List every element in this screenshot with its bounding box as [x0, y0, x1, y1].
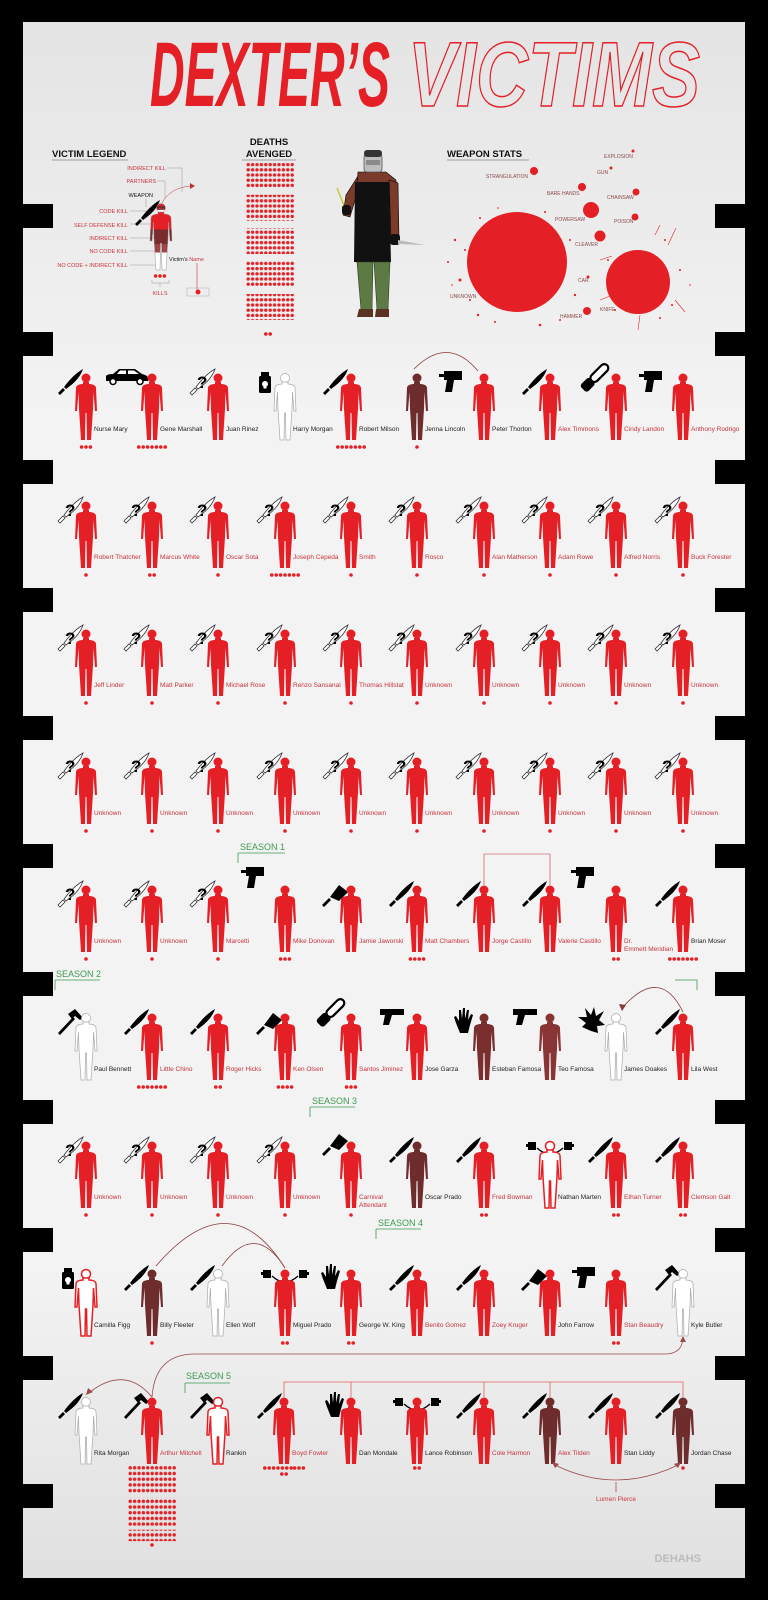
- victim: Rosco: [389, 497, 444, 577]
- panel: victim legend: CODE KILL: [99, 209, 128, 215]
- victim: Unknown: [124, 881, 187, 961]
- victim: Matt Chambers: Matt Chambers: [425, 938, 470, 945]
- arrows: Miguel Prado partners: [156, 1223, 285, 1268]
- victim: Little Chino: [124, 1009, 193, 1089]
- victim: Unknown: Unknown: [94, 1194, 121, 1201]
- victim: Unknown: Unknown: [94, 938, 121, 945]
- annotation: Lumen Pierce: [552, 1462, 681, 1503]
- victim: Unknown: [456, 625, 519, 705]
- victim: Unknown: Unknown: [359, 810, 386, 817]
- panel: weapon stats: EXPLOSION: [604, 154, 633, 160]
- victim: Unknown: Unknown: [425, 682, 452, 689]
- row 5 victims: [58, 842, 727, 961]
- victim: Boyd Fowler: [257, 1393, 329, 1476]
- victim: Stan Beaudry: Stan Beaudry: [624, 1322, 664, 1329]
- panel: weapon stats: HAMMER: [560, 314, 583, 320]
- panel: victim legend: INDIRECT KILL: [89, 236, 128, 242]
- victim: Unknown: Unknown: [160, 810, 187, 817]
- victim: Peter Thorton: Peter Thorton: [492, 426, 532, 433]
- victim: Camilla Figg: Camilla Figg: [94, 1322, 131, 1329]
- victim: Unknown: Unknown: [624, 682, 651, 689]
- victim: Unknown: [655, 753, 718, 833]
- victim: Juan Rinez: Juan Rinez: [226, 426, 259, 433]
- victim: Unknown: [389, 753, 452, 833]
- victim: Robert Thatcher: Robert Thatcher: [94, 554, 142, 561]
- victim: Zoey Kruger: [456, 1265, 529, 1336]
- victim: Esteban Famosa: [454, 1008, 542, 1080]
- panel: victim legend: KILLS: [153, 291, 168, 297]
- victim: Clemson Galt: Clemson Galt: [691, 1194, 731, 1201]
- victim: Unknown: Unknown: [226, 1194, 253, 1201]
- victim: Roger Hicks: Roger Hicks: [226, 1066, 262, 1073]
- victim: Anthony Rodrigo: Anthony Rodrigo: [691, 426, 740, 433]
- panel: weapon stats: [447, 149, 691, 330]
- victim: Boyd Fowler: Boyd Fowler: [292, 1450, 329, 1457]
- victim: Jenna Lincoln: Jenna Lincoln: [425, 426, 465, 433]
- victim: Santos Jiminez: Santos Jiminez: [359, 1066, 403, 1073]
- victim: Unknown: [58, 1137, 121, 1217]
- victim: Rankin: [190, 1393, 247, 1464]
- annotation: Lumen Pierce: Lumen Pierce: [596, 1496, 636, 1503]
- panel: victim legend: NO CODE + INDIRECT KILL: [57, 263, 128, 269]
- victim: Stan Liddy: Stan Liddy: [624, 1450, 655, 1457]
- panel: weapon stats: POWERSAW: [555, 217, 585, 223]
- victim: Unknown: Unknown: [160, 1194, 187, 1201]
- panel: victim legend: NO CODE KILL: [89, 249, 128, 255]
- victim: John Farrow: [521, 1269, 594, 1336]
- panel: weapon stats: UNKNOWN: [450, 294, 477, 300]
- victim: Alfred Norris: Alfred Norris: [624, 554, 661, 561]
- victim: Unknown: [257, 753, 320, 833]
- victim: Harry Morgan: Harry Morgan: [293, 426, 333, 433]
- victim: Matt Chambers: [389, 881, 470, 961]
- panel: weapon stats: CLEAVER: [575, 242, 598, 248]
- panel: weapon stats: WEAPON STATS: [447, 149, 522, 160]
- victim: Jenna Lincoln: [406, 374, 465, 449]
- victim: Unknown: [58, 753, 121, 833]
- panel: weapon stats: CAR: [578, 278, 589, 284]
- victim: George W. King: [321, 1264, 405, 1345]
- victim: Fred Bowman: Fred Bowman: [492, 1194, 533, 1201]
- victim: Stan Beaudry: [572, 1267, 664, 1345]
- victim: Jordan Chase: [655, 1393, 732, 1470]
- victim: Unknown: Unknown: [558, 682, 585, 689]
- victim: Carnival Attendant: Attendant: [359, 1202, 387, 1209]
- victim: Stan Liddy: [588, 1393, 655, 1464]
- victim: Thomas Hillstat: [323, 625, 404, 705]
- victim: Rita Morgan: Rita Morgan: [94, 1450, 130, 1457]
- victim: Matt Parker: Matt Parker: [160, 682, 194, 689]
- victim: James Doakes: James Doakes: [624, 1066, 668, 1073]
- arrow: Arthur Mitchell to Rita Morgan: [86, 1380, 152, 1397]
- victim: Alfred Norris: [588, 497, 661, 577]
- victim: Nurse Mary: Nurse Mary: [94, 426, 128, 433]
- panel: weapon stats: STRANGULATION: [486, 174, 528, 180]
- season 3 label: SEASON 3: [312, 1096, 357, 1106]
- panel: deaths avenged: DEATHS: [250, 137, 288, 148]
- victim: Arthur Mitchell: [124, 1393, 202, 1547]
- season 2 label: [55, 969, 101, 990]
- victim: Matt Parker: [124, 625, 194, 705]
- victim: Jose Garza: Jose Garza: [425, 1066, 459, 1073]
- panel: victim legend: Victim's Name: [169, 257, 204, 263]
- victim: Ethan Turner: Ethan Turner: [624, 1194, 662, 1201]
- victim: Jamie Jaworski: Jamie Jaworski: [359, 938, 403, 945]
- panel: weapon stats: POISON: [614, 219, 634, 225]
- victim: Renzo Sansanal: Renzo Sansanal: [293, 682, 341, 689]
- victim: Smith: Smith: [359, 554, 376, 561]
- victim: Lila West: Lila West: [691, 1066, 718, 1073]
- panel: victim legend: SELF DEFENSE KILL: [74, 223, 128, 229]
- victim: Jordan Chase: Jordan Chase: [691, 1450, 732, 1457]
- season 3 label: [310, 1096, 357, 1117]
- victim: Unknown: [389, 625, 452, 705]
- row 3 victims: [58, 625, 718, 705]
- victim: Dr. Emmett Meridian: [571, 867, 674, 961]
- victim: Kyle Butler: Kyle Butler: [691, 1322, 723, 1329]
- victim: Esteban Famosa: Esteban Famosa: [492, 1066, 542, 1073]
- victim: Unknown: Unknown: [492, 810, 519, 817]
- illustration: Dexter: [337, 150, 425, 317]
- panel: deaths avenged: AVENGED: [246, 149, 292, 160]
- victim: George W. King: George W. King: [359, 1322, 405, 1329]
- victim: Rankin: Rankin: [226, 1450, 247, 1457]
- victim: Robert Thatcher: [58, 497, 142, 577]
- victim: Arthur Mitchell: Arthur Mitchell: [160, 1450, 202, 1457]
- row 2 victims: [58, 497, 732, 577]
- victim: Brian Moser: [655, 881, 727, 961]
- victim: Unknown: Unknown: [624, 810, 651, 817]
- season 5 label: [185, 1371, 231, 1393]
- arrow: Peter Thorton to Jenna Lincoln: [414, 352, 478, 371]
- arrow: Arthur Mitchell to Kyle Butler: [152, 1336, 686, 1397]
- victim: Zoey Kruger: Zoey Kruger: [492, 1322, 529, 1329]
- victim: Unknown: Unknown: [691, 682, 718, 689]
- victim: Carnival Attendant: [322, 1134, 387, 1217]
- victim: Unknown: Unknown: [293, 810, 320, 817]
- panel: weapon stats: BARE HANDS: [547, 191, 580, 197]
- row 1 victims: [58, 352, 740, 449]
- bracket: Castillo partners: [484, 854, 550, 885]
- victim: Robert Milson: Robert Milson: [359, 426, 399, 433]
- victim: Unknown: [124, 1137, 187, 1217]
- victim: Kyle Butler: [655, 1265, 723, 1336]
- victim: Buck Forester: Buck Forester: [691, 554, 732, 561]
- panel: victim legend: WEAPON: [129, 193, 153, 199]
- victim: Mike Donovan: Mike Donovan: [293, 938, 335, 945]
- season 2 label: SEASON 2: [56, 969, 101, 979]
- season 1 label: [238, 842, 285, 863]
- victim: Ellen Wolf: Ellen Wolf: [226, 1322, 255, 1329]
- victim: Gene Marshall: Gene Marshall: [160, 426, 203, 433]
- panel: weapon stats: KNIFE: [600, 307, 615, 313]
- victim: Robert Milson: [323, 369, 399, 449]
- victim: Alex Timmons: [522, 369, 600, 440]
- victim: Ethan Turner: [588, 1137, 662, 1217]
- title: DEXTER’S: [150, 24, 390, 126]
- victim: Benito Gomez: Benito Gomez: [425, 1322, 466, 1329]
- victim: Marcus White: [124, 497, 200, 577]
- panel: victim legend: INDIRECT KILL: [127, 166, 166, 172]
- victim: Billy Fleeter: [124, 1265, 195, 1345]
- victim: Jorge Castillo: [456, 881, 532, 952]
- victim: Unknown: [323, 753, 386, 833]
- victim: Roger Hicks: [190, 1009, 262, 1089]
- victim: Unknown: Unknown: [293, 1194, 320, 1201]
- victim: Ellen Wolf: [190, 1265, 255, 1336]
- victim: Cindy Landon: Cindy Landon: [624, 426, 664, 433]
- victim: Jeff Linder: Jeff Linder: [94, 682, 125, 689]
- victim: Gene Marshall: [106, 369, 203, 449]
- victim: Unknown: Unknown: [492, 682, 519, 689]
- victim: Rosco: Rosco: [425, 554, 444, 561]
- victim: Clemson Galt: [655, 1137, 731, 1217]
- victim: Adam Rowe: Adam Rowe: [558, 554, 594, 561]
- victim: Paul Bennett: Paul Bennett: [94, 1066, 131, 1073]
- victim: Unknown: Unknown: [226, 810, 253, 817]
- panel: weapon stats: CHAINSAW: [607, 195, 634, 201]
- victim: Fred Bowman: [456, 1137, 533, 1217]
- panel: victim legend: PARTNERS: [127, 179, 156, 185]
- victim: Teo Famosa: [513, 1009, 594, 1080]
- victim: Marcetti: [190, 881, 249, 961]
- victim: Alex Timmons: Alex Timmons: [558, 426, 600, 433]
- victim: Thomas Hillstat: Thomas Hillstat: [359, 682, 404, 689]
- victim: Jamie Jaworski: [322, 885, 403, 952]
- victim: Harry Morgan: [259, 372, 333, 440]
- victim: Nathan Marten: [526, 1142, 601, 1208]
- victim: Nurse Mary: [58, 369, 128, 449]
- victim: Unknown: Unknown: [558, 810, 585, 817]
- victim: Marcus White: Marcus White: [160, 554, 200, 561]
- victim: Unknown: [522, 625, 585, 705]
- victim: Unknown: Unknown: [94, 810, 121, 817]
- victim: Peter Thorton: [439, 371, 532, 440]
- victim: Teo Famosa: Teo Famosa: [558, 1066, 594, 1073]
- victim: John Farrow: John Farrow: [558, 1322, 594, 1329]
- victim: Dr. Emmett Meridian: Emmett Meridian: [624, 946, 674, 953]
- victim: Paul Bennett: [58, 1009, 131, 1080]
- victim: Buck Forester: [655, 497, 732, 577]
- victim: Oscar Prado: [389, 1137, 462, 1208]
- victim: James Doakes: [578, 1007, 668, 1080]
- victim: Oscar Sota: [190, 497, 259, 577]
- victim: Rita Morgan: [58, 1393, 130, 1464]
- panel: deaths avenged: [242, 137, 296, 336]
- season 1 label: SEASON 1: [240, 842, 285, 852]
- row 4 victims: [58, 753, 718, 833]
- victim: Ken Olsen: Ken Olsen: [293, 1066, 324, 1073]
- victim: Billy Fleeter: Billy Fleeter: [160, 1322, 195, 1329]
- victim: Unknown: Unknown: [160, 938, 187, 945]
- victim: Alex Tilden: Alex Tilden: [558, 1450, 590, 1457]
- victim: Alan Matherson: Alan Matherson: [492, 554, 538, 561]
- victim: Renzo Sansanal: [257, 625, 341, 705]
- victim: Lance Robinson: [393, 1398, 472, 1470]
- victim: Adam Rowe: [522, 497, 594, 577]
- panel: victim legend: [52, 149, 209, 297]
- victim: Valerie Castillo: [522, 881, 601, 952]
- victim: Juan Rinez: [190, 369, 259, 440]
- victim: Dr. Emmett Meridian: Dr.: [624, 938, 632, 945]
- victim: Unknown: [124, 753, 187, 833]
- victim: Unknown: [58, 881, 121, 961]
- row 7 victims: [58, 1096, 731, 1217]
- victim: Michael Rose: [190, 625, 266, 705]
- victim: Dan Mondale: [325, 1392, 398, 1464]
- victim: Carnival Attendant: Carnival: [359, 1194, 383, 1201]
- row 9 victims: [58, 1336, 732, 1547]
- victim: Valerie Castillo: Valerie Castillo: [558, 938, 601, 945]
- victim: Unknown: [588, 753, 651, 833]
- season 4 label: SEASON 4: [378, 1218, 423, 1228]
- victim: Unknown: [257, 1137, 320, 1217]
- victim: Unknown: [588, 625, 651, 705]
- victim: Cole Harmon: [456, 1393, 531, 1464]
- victim: Unknown: [522, 753, 585, 833]
- victim: Mike Donovan: [241, 867, 335, 961]
- victim: Joseph Cepeda: [257, 497, 339, 577]
- victim: Nathan Marten: Nathan Marten: [558, 1194, 601, 1201]
- victim: Miguel Prado: [261, 1270, 332, 1345]
- season 2 end bracket: [675, 980, 697, 990]
- victim: Jeff Linder: [58, 625, 125, 705]
- bracket: Lumen's targets: [284, 1382, 683, 1397]
- victim: Ken Olsen: [256, 1013, 324, 1089]
- victim: Alan Matherson: [456, 497, 538, 577]
- row 8 victims: [62, 1218, 723, 1345]
- victim: Lila West: [655, 1009, 718, 1080]
- victim: Smith: [323, 497, 376, 577]
- victim: Jose Garza: [380, 1009, 459, 1080]
- victim: Unknown: [190, 753, 253, 833]
- victim: Camilla Figg: [62, 1268, 131, 1336]
- victim: Dan Mondale: Dan Mondale: [359, 1450, 398, 1457]
- arrow: Lila West to James Doakes: [619, 987, 683, 1012]
- victim: Benito Gomez: [389, 1265, 466, 1336]
- victim: Cole Harmon: Cole Harmon: [492, 1450, 531, 1457]
- victim: Unknown: [456, 753, 519, 833]
- victim: Marcetti: Marcetti: [226, 938, 249, 945]
- victim: Unknown: Unknown: [691, 810, 718, 817]
- victim: Little Chino: Little Chino: [160, 1066, 193, 1073]
- season 4 label: [376, 1218, 423, 1239]
- victim: Cindy Landon: [580, 362, 664, 440]
- victim: Alex Tilden: [522, 1393, 590, 1464]
- victim: Unknown: Unknown: [425, 810, 452, 817]
- victim: Unknown: [190, 1137, 253, 1217]
- victim: Anthony Rodrigo: [639, 371, 740, 440]
- victim: Santos Jiminez: [316, 997, 403, 1089]
- victim: Michael Rose: Michael Rose: [226, 682, 266, 689]
- credit: DEHAHS: [655, 1553, 701, 1565]
- victim: Brian Moser: Brian Moser: [691, 938, 727, 945]
- victim: Jorge Castillo: Jorge Castillo: [492, 938, 532, 945]
- panel: victim legend: VICTIM LEGEND: [52, 149, 127, 160]
- victim: Miguel Prado: Miguel Prado: [293, 1322, 332, 1329]
- victim: Lance Robinson: Lance Robinson: [425, 1450, 472, 1457]
- victim: Unknown: [655, 625, 718, 705]
- panel: weapon stats: GUN: [597, 170, 608, 176]
- season 5 label: SEASON 5: [186, 1371, 231, 1381]
- victim: Oscar Prado: Oscar Prado: [425, 1194, 462, 1201]
- victim: Oscar Sota: Oscar Sota: [226, 554, 259, 561]
- row 6 victims: [55, 969, 718, 1089]
- victim: Joseph Cepeda: Joseph Cepeda: [293, 554, 339, 561]
